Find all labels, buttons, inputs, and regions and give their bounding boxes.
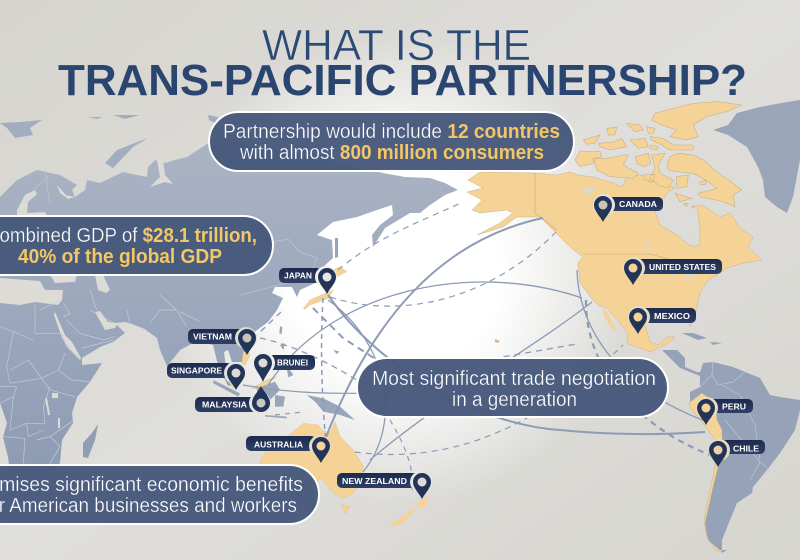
callout: 12 countries: with almost 800 million consumers bbox=[239, 142, 544, 164]
pin: Australia bbox=[246, 435, 331, 463]
pin: United States: UNITED STATES bbox=[649, 262, 716, 272]
Sakhalin bbox=[335, 238, 338, 258]
pin: Mexico: MEXICO bbox=[654, 311, 690, 321]
route: Vietnam to Japan, dashed bbox=[257, 312, 281, 335]
pin: Malaysia: MALAYSIA bbox=[202, 400, 247, 410]
Hawaii bbox=[495, 339, 500, 343]
pin: Peru: PERU bbox=[722, 402, 746, 412]
trade routes bbox=[243, 202, 718, 490]
pin: Malaysia bbox=[195, 386, 271, 414]
callout: 12 countries bbox=[209, 112, 574, 171]
pin: Japan: JAPAN bbox=[284, 270, 312, 280]
pin: New Zealand: NEW ZEALAND bbox=[342, 476, 407, 486]
title bbox=[58, 21, 747, 105]
route: USA to Chile, dashed bbox=[586, 300, 718, 458]
route: Japan to Canada, dashed bbox=[330, 232, 556, 306]
northern borders bbox=[0, 170, 317, 295]
land: Greenland bbox=[713, 100, 800, 213]
land: Central America and Caribbean bbox=[662, 333, 722, 376]
route: Canada to Australia bbox=[323, 218, 543, 445]
pin: Vietnam bbox=[188, 327, 257, 355]
route: Singapore to Peru bbox=[243, 385, 400, 393]
pin: Chile bbox=[708, 439, 765, 467]
seas and lakes cut into Eurasia and Africa bbox=[0, 160, 173, 428]
Arctic Canadian islands bbox=[575, 102, 742, 208]
Baja California bbox=[602, 307, 617, 332]
Arctic islands bbox=[0, 115, 218, 168]
pin: Mexico bbox=[628, 306, 696, 334]
route: Japan to Alaska, dashed bbox=[338, 202, 463, 270]
route: Malaysia to Papua, dashed bbox=[275, 412, 303, 415]
callout: 12 countries: Partnership would include 12 countries bbox=[223, 121, 560, 143]
route: Vietnam to hub, dashed bbox=[260, 338, 360, 382]
route: hub to Mexico, dashed bbox=[460, 344, 577, 362]
pin: Singapore: SINGAPORE bbox=[171, 366, 222, 376]
route: Japan to New Zealand bbox=[328, 300, 385, 472]
route: Japan to trade hub, dashed bbox=[313, 308, 380, 362]
pin: Chile: CHILE bbox=[733, 444, 759, 454]
callout: trade negotiation: in a generation bbox=[452, 389, 577, 411]
pin: Japan bbox=[279, 266, 337, 294]
TPP land: Peru and Chile bbox=[689, 393, 722, 552]
pin: United States bbox=[623, 257, 722, 285]
route: Australia to Mexico, dashed bbox=[355, 345, 623, 454]
callout: trade negotiation bbox=[357, 358, 668, 417]
route: Japan to Peru bbox=[328, 295, 705, 434]
pin: Singapore bbox=[167, 362, 246, 390]
pin: Brunei bbox=[253, 352, 315, 382]
route: Japan to Australia, dashed bbox=[322, 298, 326, 445]
South-East Asian islands bbox=[213, 327, 355, 420]
title line 2: TRANS-PACIFIC PARTNERSHIP? bbox=[58, 57, 747, 105]
callout: GDP bbox=[0, 216, 273, 275]
callout: economic benefits bbox=[0, 465, 319, 524]
TPP land: Australia, Japan, Malaysia, Vietnam, Singapore bbox=[227, 267, 363, 513]
route: Malaysia to USA bbox=[268, 282, 582, 385]
route: Mexico to New Zealand bbox=[370, 302, 592, 460]
pin: Brunei: BRUNEI bbox=[277, 358, 308, 368]
pin: Australia: AUSTRALIA bbox=[254, 440, 303, 450]
TPP land: North America bbox=[467, 172, 762, 352]
land: Eurasia and Africa bbox=[0, 140, 458, 472]
Madagascar bbox=[83, 424, 98, 458]
route: to New Zealand, dashed bbox=[390, 420, 413, 490]
callout: trade negotiation: Most significant trade negotiation bbox=[372, 368, 656, 390]
country borders bbox=[0, 290, 200, 463]
pin: Canada: CANADA bbox=[619, 199, 657, 209]
land: South America bbox=[690, 362, 800, 553]
pin: Canada bbox=[593, 194, 663, 222]
title line 1: WHAT IS THE bbox=[262, 21, 531, 70]
TPP land: New Zealand bbox=[390, 495, 428, 526]
callout: GDP: 40% of the global GDP bbox=[18, 246, 222, 268]
pin: Vietnam: VIETNAM bbox=[193, 332, 232, 342]
pin: Peru bbox=[696, 397, 753, 425]
pin: New Zealand bbox=[337, 471, 432, 499]
route: USA to Peru bbox=[577, 270, 705, 421]
South American borders bbox=[700, 362, 770, 480]
lakes and US border bbox=[580, 187, 695, 279]
